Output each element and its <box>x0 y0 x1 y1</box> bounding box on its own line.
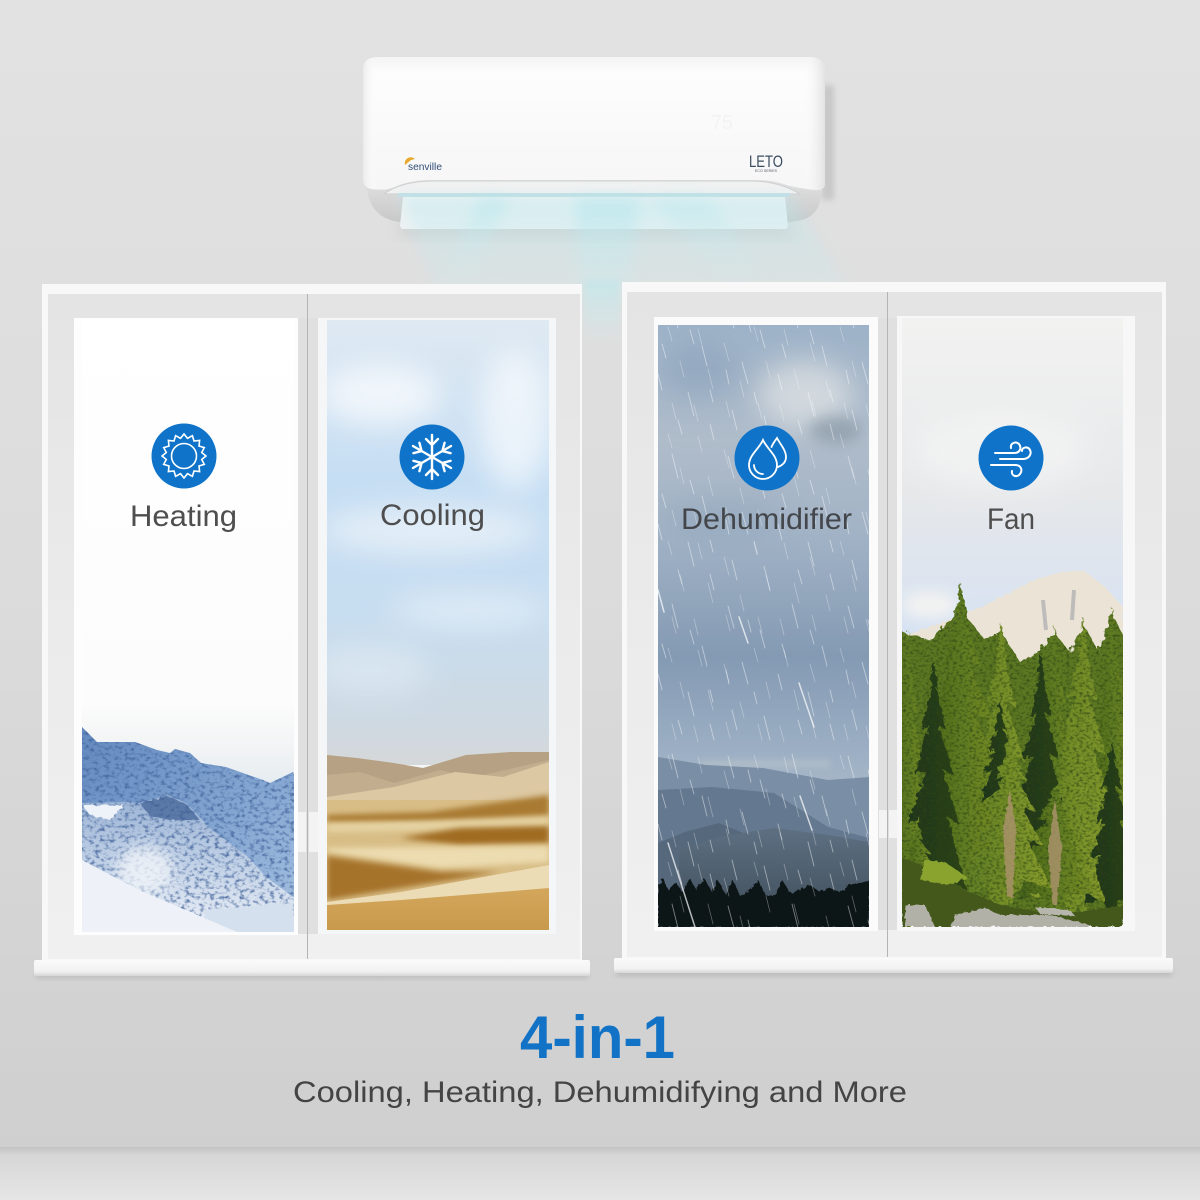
desert dunes <box>327 752 549 932</box>
icon: water drops <box>734 426 800 490</box>
window sill <box>34 960 590 976</box>
right window frame <box>622 282 1166 960</box>
trunks <box>1003 790 1062 905</box>
pane: dehumidifier <box>654 317 878 931</box>
rain <box>658 325 869 927</box>
window shadow <box>36 972 588 978</box>
pane: cooling <box>310 318 556 934</box>
air conditioner unit <box>363 57 834 236</box>
meadow and rocks <box>902 858 1123 927</box>
label: Heating: Heating <box>130 500 237 533</box>
pane: fan <box>882 316 1145 931</box>
model logo: LETO: LETO <box>749 152 783 171</box>
floor strip <box>0 1147 1200 1200</box>
window shadow <box>616 970 1172 976</box>
icon: snowflake <box>400 424 464 490</box>
left window <box>34 284 590 978</box>
heading: 4-in-1: 4-in-1 <box>520 1004 675 1071</box>
subheading: Cooling, Heating, Dehumidifying and More <box>293 1076 907 1109</box>
brand logo: senville: senville <box>408 161 442 173</box>
misty mountains <box>658 757 869 930</box>
label: Cooling: Cooling <box>380 499 485 532</box>
snowy peak <box>905 570 1123 670</box>
icon: sun <box>152 424 216 488</box>
left window frame <box>42 284 582 962</box>
air conditioner unit: 75 <box>711 112 733 134</box>
forest <box>902 583 1123 927</box>
model logo: LETO: ECO SERIES <box>755 169 778 173</box>
label: Dehumidifier: Dehumidifier <box>681 503 852 536</box>
label: Fan: Fan <box>987 503 1035 536</box>
pane: heating <box>74 318 298 935</box>
icon: wind <box>978 426 1044 490</box>
window sill <box>614 958 1173 973</box>
brand logo: senville <box>405 157 442 173</box>
snow mountains <box>82 727 296 935</box>
right window <box>614 282 1173 976</box>
cold air stream <box>400 196 850 345</box>
